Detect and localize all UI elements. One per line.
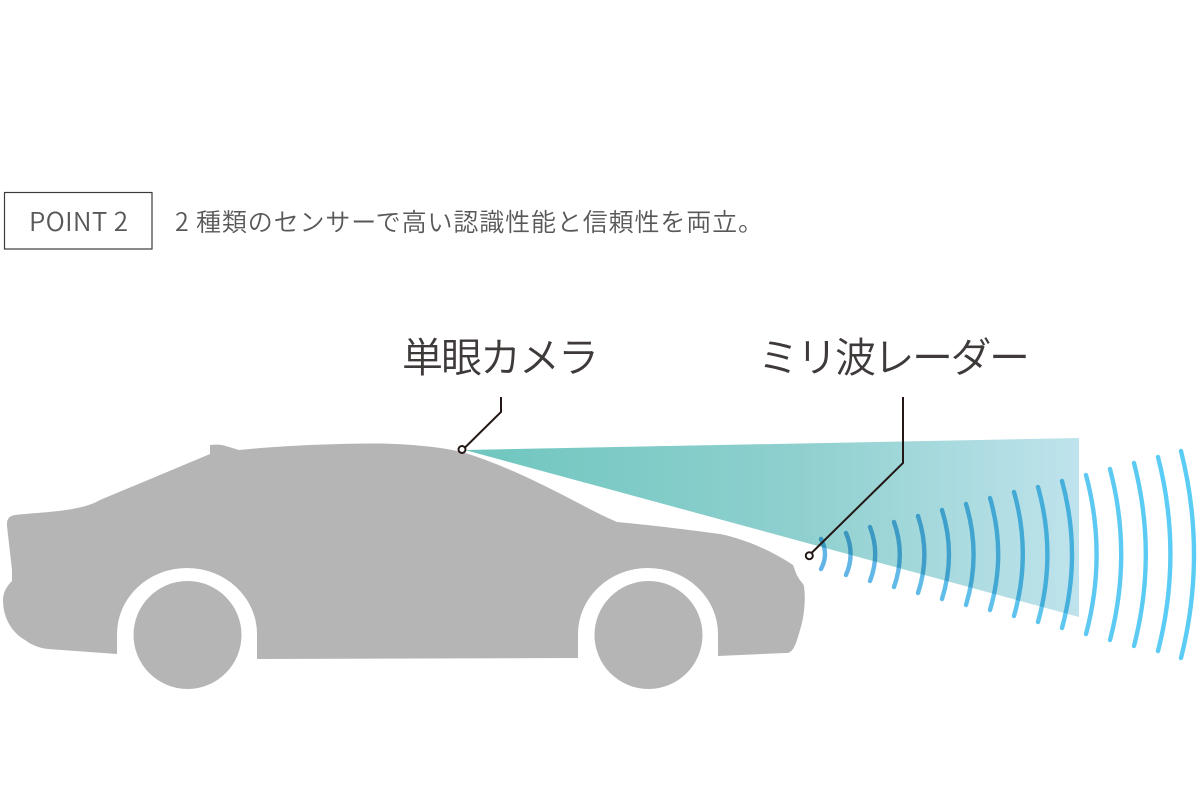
front wheel [594,581,702,689]
camera leader line [458,397,501,453]
rear wheel [134,581,242,689]
camera field of view beam [465,438,1079,617]
radar waves [821,451,1194,658]
label: monocular camera: 単眼カメラ [402,324,599,384]
car silhouette [3,444,805,689]
label: millimeter wave radar: ミリ波レーダー [758,324,1030,384]
point badge: POINT 2 [29,202,128,239]
radar leader line [806,397,903,559]
point badge [4,192,152,249]
heading text: 2 種類のセンサーで高い認識性能と信頼性を両立。 [175,203,763,239]
car body [3,444,805,659]
